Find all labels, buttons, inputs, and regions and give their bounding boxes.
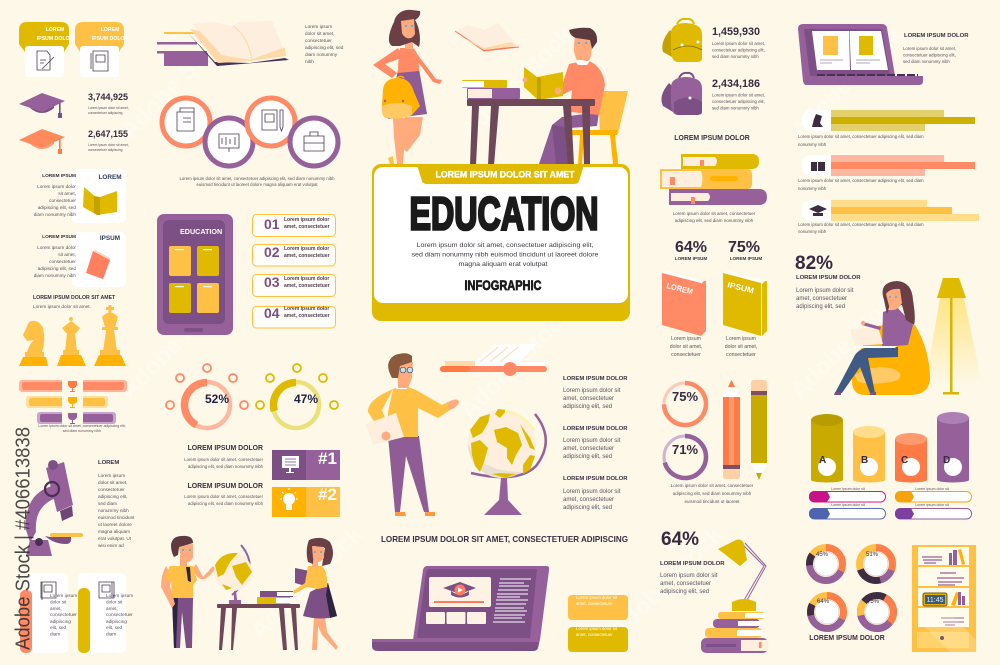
column B: B [861, 455, 868, 466]
icon: purple backpack [661, 73, 702, 115]
icon: olive pencil [751, 380, 767, 480]
text: microscope description: magna aliquam [98, 529, 130, 534]
item 03: amet, consectetuer [284, 283, 330, 289]
subtitle: infographic: INFOGRAPHIC [464, 277, 542, 293]
stat: 2,647,155: 2,647,155 [88, 129, 128, 139]
button: olive note: Lorem ipsum dolor sit [576, 626, 618, 631]
text: book description: Lorem ipsum [305, 24, 332, 29]
text: book captions: dolor sit amet, [725, 344, 757, 350]
illustration: large globe [468, 409, 546, 515]
item 3 [563, 476, 628, 511]
text: book captions: consectetuer [671, 352, 701, 358]
text: book description: adipiscing elit, sed [305, 45, 344, 50]
item 1: amet, consectetuer [563, 396, 614, 402]
text: microscope description: sed diam [98, 501, 117, 506]
chart: ring 75%: 75% [672, 389, 698, 404]
item 01: Lorem ipsum dolor [284, 217, 329, 223]
title: EDUCATION [410, 188, 598, 240]
chart: segmented donut 45% [810, 548, 842, 580]
ribbon card 2 [75, 22, 129, 77]
panel: lorem book card: diam nonummy nibh [34, 212, 76, 217]
item 3: Lorem ipsum dolor sit [563, 489, 621, 495]
stat: 2,434,186 [712, 78, 765, 110]
text: ranked item 2: Lorem ipsum dolor sit amet, consectetuer [184, 494, 264, 499]
heading: book stack: LOREM IPSUM DOLOR [674, 135, 750, 142]
stat: 82%: LOREM IPSUM DOLOR [796, 275, 861, 281]
pill: magenta: Lorem ipsum dolor sit [831, 487, 865, 491]
icon: chess bishop [57, 317, 86, 366]
panel: ipsum book card: IPSUM [100, 235, 120, 242]
chart: segmented donut 64% [810, 596, 844, 628]
icon: globe on table [214, 545, 300, 650]
illustration: olive book: IPSUM [727, 280, 755, 296]
description: magna aliquam erat volutpat [458, 261, 548, 268]
panel: note card orange: Lorem ipsum [50, 593, 77, 598]
ribbon card 1: IPSUM DOLOR [37, 36, 74, 42]
ribbon card 2: IPSUM DOLOR [92, 36, 129, 42]
badge: #1 [272, 449, 340, 480]
pill: orange [895, 487, 972, 502]
badge: #2: #2 [318, 485, 337, 504]
diagram: four linked icon circles [162, 98, 338, 166]
text: book description: consectetuer [305, 38, 332, 43]
illustration: teacher with glasses [366, 353, 459, 516]
panel: lorem book card: adipiscing elit, sed [38, 205, 76, 210]
text: book description: nibh [305, 59, 314, 64]
chart: trophy ranking bars [19, 378, 127, 433]
text: circles caption: Lorem ipsum dolor sit amet, consectetuer adipiscing elit, sed diam nonummy nibh [179, 176, 335, 181]
item 1: LOREM IPSUM DOLOR [563, 376, 628, 382]
stat: 1,459,930 [712, 26, 765, 59]
stat: 3,744,925 [88, 92, 129, 115]
panel: lorem book card [34, 169, 126, 223]
chart: segmented donut 51% [860, 548, 892, 580]
stat: 3,744,925: consectetuer adipiscing [88, 111, 123, 115]
description: Lorem ipsum dolor sit amet, consectetuer adipiscing elit, [416, 242, 594, 249]
heading: laptop section: LOREM IPSUM DOLOR SIT AMET, CONSECTETUER ADIPISCING [381, 534, 628, 544]
chart: segmented donut 51%: 51% [866, 552, 879, 558]
icon: chess knight [19, 321, 48, 366]
stat: 64% with lamp: amet, consectetuer [660, 581, 711, 587]
chart: segmented donut 45%: 45% [816, 552, 829, 558]
stat: 64%: LOREM IPSUM [675, 256, 707, 261]
bar: third place [37, 410, 116, 426]
illustration: laptop with video course [372, 566, 549, 651]
text: ranked item 1: Lorem ipsum dolor sit amet, consectetuer [184, 457, 264, 462]
button: olive note: amet, consectetuer [576, 632, 613, 637]
item 1: adipiscing elit, sed [563, 404, 612, 410]
stat: 64% with lamp: 64% [661, 529, 699, 550]
button: amber note [568, 595, 628, 620]
chart: donut 47%: 47% [294, 392, 318, 406]
illustration: olive book [723, 271, 767, 336]
stat: 82% [795, 253, 861, 310]
pill: purple [895, 503, 972, 519]
chart: bar group chess [798, 110, 975, 147]
chart: ring 71%: 71% [672, 442, 698, 457]
text: ranked item 2: adipiscing elit, sed diam nonummy nibh [188, 501, 264, 506]
item 2: amet, consectetuer [563, 446, 614, 452]
panel: note card orange: consectetuer [50, 612, 77, 617]
text: microscope description: consectetuer [98, 487, 125, 492]
item 01: 01 [264, 216, 280, 232]
item 1: Lorem ipsum dolor sit [563, 388, 621, 394]
badge: #2 [272, 485, 340, 517]
text: microscope description: erat volutpat. Ut [98, 536, 132, 541]
illustration: girl on beanbag with laptop [834, 281, 930, 395]
text: book captions: dolor sit amet, [670, 344, 702, 350]
stat: 64% with lamp: LOREM IPSUM DOLOR [660, 561, 725, 567]
item 01: amet, consectetuer [284, 224, 330, 230]
text: laptop description [903, 33, 969, 64]
item 2: Lorem ipsum dolor sit [563, 438, 621, 444]
illustration: stack of three books [660, 154, 767, 205]
chart: bar group chess: nonummy nibh [798, 142, 827, 147]
ribbon card 2: LOREM [101, 27, 119, 33]
illustration: phone with books: EDUCATION [180, 227, 222, 236]
stat: 1,459,930: Lorem ipsum dolor sit amet, [712, 41, 765, 46]
circle: presentation board icon [205, 118, 253, 166]
chart: ring 71% [664, 436, 706, 478]
item 03: 03 [264, 274, 280, 290]
text: ranked item 2 [184, 483, 264, 506]
illustration: girl with backpack [373, 10, 442, 164]
chart: bar group chess: Lorem ipsum dolor sit amet, consectetuer adipiscing elit, sed diam [798, 134, 924, 139]
panel: note card olive: consectetuer [106, 612, 133, 617]
watermark: adobe stock id: Adobe Stock | #406613838 [12, 427, 34, 650]
text: Adobe Stock [785, 281, 908, 404]
panel: note card olive: elit, sed [106, 625, 123, 630]
list: numbered items [252, 214, 336, 328]
illustration: microscope [26, 460, 83, 556]
text: three lorem items [563, 376, 628, 511]
column C [895, 433, 927, 482]
chart: trophy ranking bars: Lorem ipsum dolor sit amet, consectetuer adipiscing elit, [38, 424, 126, 428]
text: microscope description: nonummy nibh [98, 508, 129, 513]
chart: segmented donut 75% [860, 596, 894, 628]
text: microscope description: LOREM [98, 460, 119, 466]
text: circles caption: euismod tincidunt ut laoreet dolore magna aliquam erat volutpat [196, 182, 318, 187]
pill: blue [809, 503, 886, 519]
illustration: flat open book [440, 344, 547, 376]
text: laptop description: sed diam nonummy nibh [903, 59, 950, 64]
stat: 82%: 82% [795, 253, 833, 274]
stat: 1,459,930: consectetuer adipiscing elit, [712, 48, 765, 52]
illustration: floating open book [455, 23, 519, 51]
panel: note card olive: diam [106, 632, 116, 636]
books on table [462, 80, 520, 99]
chart: bar group book: nonummy nibh [798, 186, 827, 191]
chart: bar group graduation: nonummy nibh [798, 229, 827, 234]
icon: purple graduation cap [19, 93, 65, 118]
column A: A [819, 455, 826, 466]
illustration: orange book [662, 271, 706, 336]
text: book description: diam nonummy [305, 52, 338, 57]
button: olive note [568, 626, 628, 652]
chart: trophy ranking bars: sed diam nonummy nibh [63, 429, 101, 433]
circle: book icon [162, 98, 210, 146]
panel: main title card [372, 164, 630, 321]
panel: note card orange: amet, [50, 606, 62, 611]
stat: 2,647,155 [88, 129, 129, 152]
pill: orange: Lorem ipsum dolor sit [915, 487, 949, 491]
icon: orange graduation cap [19, 129, 65, 154]
panel: lorem book card: consectetuer [49, 198, 76, 203]
chart: donut 52% [166, 364, 248, 428]
item 01 [252, 214, 336, 236]
table [467, 99, 595, 165]
panel: lorem book card: sit amet, [58, 191, 76, 196]
text: Adobe Stock [115, 281, 238, 404]
panel: note card orange: elit, sed [50, 625, 67, 630]
description [412, 242, 599, 268]
item 04: Lorem ipsum dolor [284, 306, 329, 312]
text: Adobe Stock [245, 521, 368, 644]
heading: chess section [33, 295, 116, 309]
panel: ipsum book card: adipiscing elit, sed [38, 266, 76, 271]
text: microscope description: wisi enim ad [98, 543, 124, 548]
stat: 3,744,925: Lorem ipsum dolor sit amet, [88, 106, 129, 110]
column C: C [901, 455, 908, 466]
item 2: LOREM IPSUM DOLOR [563, 426, 628, 432]
text: laptop description: Lorem ipsum dolor sit amet, [903, 46, 956, 51]
heading: chess section: LOREM IPSUM DOLOR SIT AMET [33, 295, 116, 301]
illustration: bookshelf with clock: 11:45 [926, 597, 944, 604]
ribbon subtitle [417, 165, 584, 184]
item 3: adipiscing elit, sed [563, 505, 612, 511]
text: ring caption: Lorem ipsum dolor sit amet, consectetuer [671, 483, 754, 488]
column D: D [943, 455, 950, 466]
chart: bar group book [798, 155, 975, 191]
icon: olive backpack [662, 19, 702, 62]
stat: 75%: LOREM IPSUM [730, 256, 762, 261]
panel: note card olive [78, 573, 133, 653]
panel: ipsum book card: sit amet, [58, 252, 76, 257]
text: laptop description: LOREM IPSUM DOLOR [904, 33, 969, 39]
item 2: adipiscing elit, sed [563, 454, 612, 460]
panel: ipsum book card: diam nonummy nibh [34, 273, 76, 278]
panel: note card orange [20, 573, 77, 653]
text: ring caption: adipiscing elit, sed diam nonummy nibh [673, 491, 752, 496]
text: microscope description: dolor sit amet, [98, 480, 127, 485]
text: ranked item 1: LOREM IPSUM DOLOR [188, 445, 263, 452]
panel: ipsum book card: LOREM IPSUM [42, 234, 76, 240]
stat: 1,459,930: sed diam nonummy nibh [712, 54, 759, 59]
bar: first place [19, 378, 127, 394]
stat: 2,647,155: Lorem ipsum dolor sit amet, [88, 143, 129, 147]
text: book stack caption: adipiscing elit, sed diam nonummy nibh [675, 218, 754, 223]
pill: purple: Lorem ipsum dolor sit [915, 503, 949, 507]
text: laptop description: consectetuer adipiscing elit, [903, 52, 956, 58]
chart: segmented donut 64%: 64% [817, 599, 830, 605]
item 3: amet, consectetuer [563, 497, 614, 503]
text: book description: dolor sit amet, [305, 31, 334, 36]
stat: 2,434,186: sed diam nonummy nibh [712, 106, 759, 110]
circle: notebook icon [247, 98, 295, 146]
text: microscope description: adipiscing elit, [98, 494, 127, 499]
panel: note card olive: adipiscing [106, 619, 127, 624]
illustration: floor lamp [925, 278, 982, 394]
text: book captions: consectetuer [726, 352, 756, 358]
stat: 3,744,925: 3,744,925 [88, 92, 128, 102]
panel: lorem book card: Lorem ipsum dolor [37, 184, 76, 189]
text: ranked item 1: adipiscing elit, sed diam nonummy nibh [188, 464, 264, 469]
figure: teacher [161, 536, 215, 648]
stat: 1,459,930: 1,459,930 [712, 26, 760, 38]
item 02 [252, 244, 336, 266]
item 03 [252, 274, 336, 296]
stat: 2,434,186: consectetuer adipiscing elit, [712, 99, 765, 104]
badge: #1: #1 [318, 449, 337, 468]
bar: second place [26, 394, 108, 410]
stat: 82%: Lorem ipsum dolor sit [796, 288, 854, 294]
item 2 [563, 426, 628, 460]
stat: 82%: amet, consectetuer [796, 296, 847, 302]
text: book captions: Lorem ipsum [671, 336, 701, 342]
text: book captions: Lorem ipsum [726, 336, 756, 342]
heading: chess section: Lorem ipsum dolor sit amet. [33, 304, 91, 309]
text: ring caption: euismod tincidunt ut laoreet [684, 499, 740, 504]
item 04 [252, 305, 336, 328]
text: Adobe Stock [115, 21, 238, 144]
item 02: 02 [264, 244, 280, 260]
text: book stack caption: Lorem ipsum dolor sit amet, consectetuer [673, 211, 756, 216]
illustration: teacher, globe, student [161, 536, 338, 650]
chart: donut 47% [256, 364, 338, 428]
stat: 2,434,186: Lorem ipsum dolor sit amet, [712, 92, 765, 98]
panel: ipsum book card: consectetuer [49, 259, 76, 264]
stat: 2,647,155: consectetuer adipiscing [88, 148, 123, 152]
text: book captions [670, 336, 757, 358]
ribbon subtitle: LOREM IPSUM DOLOR SIT AMET [436, 170, 575, 180]
description: sed diam nonummy nibh euismod tincidunt ut laoreet dolore [412, 252, 599, 258]
button: amber note: Lorem ipsum dolor sit [576, 595, 618, 600]
chart: progress pills [809, 487, 972, 519]
chair [572, 91, 628, 164]
stat: 82%: adipiscing elit, sed [796, 304, 845, 310]
icon: orange pencil [723, 380, 740, 479]
column D [937, 412, 969, 482]
chart: segmented donut 75%: 75% [867, 599, 880, 605]
stat: 2,434,186: 2,434,186 [712, 78, 760, 90]
heading: donuts: LOREM IPSUM DOLOR [809, 635, 885, 642]
illustration: laptop with ebooks [798, 24, 923, 85]
item 04: amet, consectetuer [284, 313, 330, 319]
text: Adobe Stock [455, 21, 578, 144]
illustration: desk lamp on books [701, 540, 768, 653]
chart: bar group graduation: Lorem ipsum dolor sit amet, consectetuer adipiscing elit, sed diam [798, 222, 924, 227]
button: amber note: amet, consectetuer [576, 601, 613, 606]
illustration: phone with books [157, 214, 233, 335]
stat: 64%: 64% [675, 239, 707, 256]
circle: briefcase icon [290, 118, 338, 166]
illustration: orange book: LOREM [666, 281, 694, 297]
ribbon card 1: LOREM [46, 27, 64, 33]
man [522, 28, 605, 164]
item 03: Lorem ipsum dolor [284, 276, 329, 282]
stat: 64% with lamp: adipiscing elit, sed [660, 589, 709, 595]
item 02: Lorem ipsum dolor [284, 246, 329, 252]
panel: note card orange: adipiscing [50, 619, 71, 624]
panel: note card olive: dolor sit [106, 600, 123, 604]
item 04: 04 [264, 305, 280, 321]
ribbon card 1 [19, 22, 74, 77]
text: microscope description: ut laoreet dolore [98, 522, 132, 527]
text: Adobe Stock [455, 301, 578, 424]
panel: ribbon cards [19, 22, 129, 77]
panel: lorem book card: LOREM [98, 174, 122, 181]
text: Adobe Stock [605, 521, 728, 644]
panel: note card olive: Lorem ipsum [106, 593, 133, 598]
text: microscope description: euismod tincidunt [98, 515, 135, 520]
text: Adobe Stock [785, 21, 908, 144]
panel: lorem book card: LOREM IPSUM [42, 173, 76, 179]
text: microscope description: Lorem ipsum [98, 473, 125, 478]
illustration: man reading at table [462, 28, 628, 165]
panel: note card orange: diam [50, 632, 60, 636]
panel: note card olive: amet, [106, 606, 118, 611]
text: ranked item 2: LOREM IPSUM DOLOR [188, 483, 263, 490]
column A [811, 414, 843, 482]
panel: ipsum book card [34, 232, 126, 287]
figure: student [293, 538, 338, 650]
chart: bar group book: Lorem ipsum dolor sit amet, consectetuer adipiscing elit, sed diam [798, 178, 924, 183]
stat: 75%: 75% [728, 239, 760, 256]
icon: chess king [94, 305, 126, 366]
panel: ipsum book card: Lorem ipsum dolor [37, 245, 76, 250]
chart: bar group graduation [798, 200, 979, 234]
item 3: LOREM IPSUM DOLOR [563, 476, 628, 482]
pill: blue: Lorem ipsum dolor sit [831, 503, 865, 507]
panel: note card orange: dolor sit [50, 600, 67, 604]
chart: ring 75% [664, 383, 706, 425]
text: ranked item 1 [184, 445, 264, 469]
illustration: open book on stack [157, 21, 289, 66]
item 02: amet, consectetuer [284, 253, 330, 259]
illustration: bookshelf with clock [912, 545, 976, 652]
stat: 64% with lamp [660, 529, 725, 595]
stat: 64% with lamp: Lorem ipsum dolor sit [660, 573, 718, 579]
chart: donut 52%: 52% [205, 392, 229, 406]
pill: magenta [809, 487, 886, 502]
text: microscope description [98, 460, 135, 548]
column B [853, 426, 885, 482]
chart: cylinder columns [811, 412, 969, 482]
item 1 [563, 376, 628, 410]
